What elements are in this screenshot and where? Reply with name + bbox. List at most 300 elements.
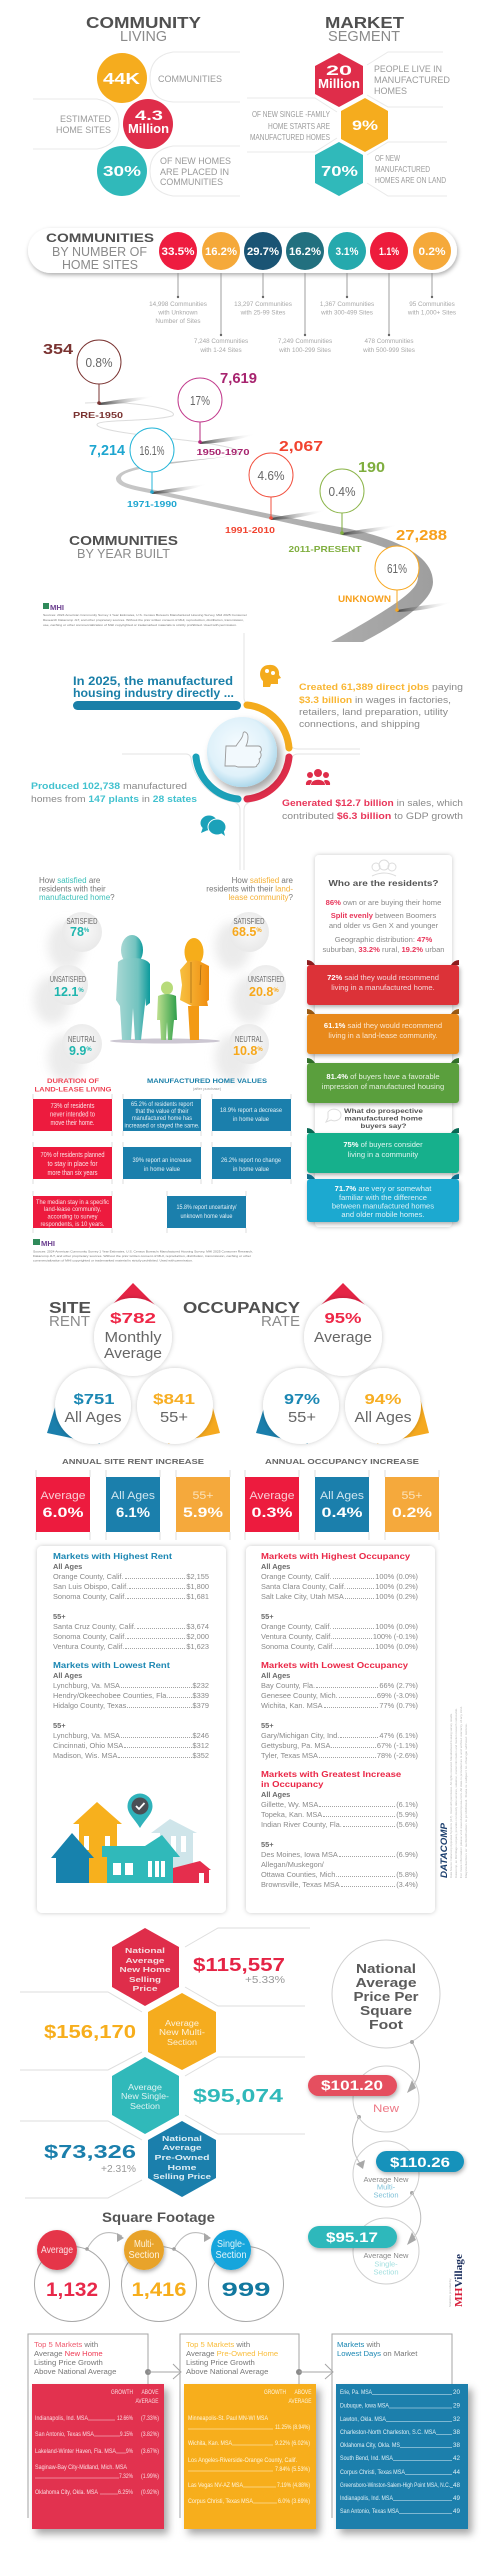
- card: no change: 26.2% report no change: [221, 1157, 281, 1164]
- stat: 30% placed in communities: COMMUNITIES: [160, 177, 223, 188]
- price: new $101.20: New: [373, 2103, 399, 2115]
- stat: satisfied 68.5%: 68.5: [232, 925, 256, 939]
- stat: all ages 0.4%: All Ages: [320, 1490, 365, 1502]
- marker: pre-1950: PRE-1950: [73, 410, 123, 420]
- heading: Listing Price Growth: [34, 2358, 103, 2367]
- list: markets with highest, lowest and greatest increase in occupancy: Indian River County, Fla.: [261, 1820, 342, 1829]
- card: median stay: according to survey: [48, 1214, 98, 1220]
- site count labels: 7,248 Communities: [194, 338, 248, 345]
- list: markets with highest, lowest and greatest increase in occupancy: All Ages: [261, 1562, 290, 1571]
- data table: 6.0% (3.69%): [278, 2498, 310, 2505]
- stat: 55+ 0.2%: 55+: [402, 1490, 422, 1502]
- stat: 55+ 5.9%: 5.9%: [183, 1504, 224, 1520]
- list: markets with highest and lowest rent: Madison, Wis. MSA: [53, 1751, 117, 1760]
- card: stay in place: to stay in place for: [48, 1161, 98, 1168]
- percent circles: 0.2%: [418, 246, 446, 258]
- hexagon: new single-section: Average: [128, 2083, 162, 2092]
- card: increased or stayed: increased or stayed the same.: [124, 1122, 200, 1130]
- banner: 72% recommend: [307, 960, 459, 1005]
- vertical credit: MHVillage: [448, 2253, 465, 2307]
- list: markets with highest and lowest rent: $1,623: [186, 1642, 209, 1651]
- marker: pre-1950: 354: [43, 341, 74, 358]
- percent circles: 3.1%: [336, 246, 359, 258]
- list: markets with highest and lowest rent: Hidalgo County, Texas: [53, 1701, 126, 1710]
- price: new $101.20: $101.20: [321, 2078, 383, 2093]
- banner: 81.4% favorable: impression of manufactured housing: [322, 1082, 444, 1091]
- hexagon: new home selling price: New Home: [120, 1965, 170, 1974]
- stat: average 6.0%: [36, 1477, 90, 1532]
- value: $115,557: $115,557: [193, 1955, 285, 1975]
- price: multi-section $110.26: Section: [373, 2190, 399, 2200]
- marker: 1971-1990: 16.1%: [140, 443, 165, 458]
- data table: 49: [453, 2495, 460, 2502]
- list: markets with highest, lowest and greatest increase in occupancy: 47% (6.1%): [379, 1731, 418, 1740]
- data table: (0.92%): [141, 2489, 159, 2496]
- banner: 81.4% favorable: [307, 1058, 459, 1103]
- price: single-section $95.17: $95.17: [326, 2230, 378, 2245]
- panel: duration of land-lease living: [33, 1078, 112, 1228]
- hexagon: pre-owned selling price: [148, 2121, 216, 2197]
- stat: 55+ 5.9%: [176, 1477, 230, 1532]
- heading: occupancy rate: [183, 1300, 301, 1330]
- heading: by number of home sites: BY NUMBER OF: [52, 244, 147, 259]
- stat: 44K communities: COMMUNITIES: [158, 74, 222, 85]
- stat: unsatisfied 20.8%: %: [273, 988, 279, 994]
- percent circles: 1.1%: [379, 246, 399, 258]
- price: multi-section $110.26: $110.26: [390, 2155, 451, 2170]
- list: markets with highest and lowest rent: Ventura County, Calif.: [53, 1642, 124, 1651]
- stat: average 0.3%: Average: [250, 1490, 294, 1502]
- stat: single-section 999: Section: [216, 2249, 247, 2261]
- stat: average 6.0%: Average: [40, 1490, 86, 1502]
- icon: chat bubbles: [200, 816, 226, 836]
- list: markets with highest, lowest and greatest increase in occupancy: Sonoma County, Calif.: [261, 1642, 334, 1651]
- percent circles: 29.7%: [247, 246, 279, 258]
- card: decrease: [212, 1099, 291, 1131]
- heading: market segment: MARKET: [325, 15, 405, 32]
- stat: unsatisfied 12.1%: 12.1: [54, 985, 78, 999]
- callout: $841 55+: [137, 1368, 220, 1444]
- list: markets with highest, lowest and greatest increase in occupancy: 66% (2.7%): [379, 1681, 418, 1690]
- card: median stay: The median stay in a specific: [36, 1199, 110, 1206]
- heading: market segment: [325, 15, 405, 45]
- stat: 4.3 million home sites: HOME SITES: [56, 125, 111, 136]
- site count labels: with 100-299 Sites: [278, 347, 331, 354]
- resident facts: [322, 898, 445, 954]
- man: [116, 935, 150, 1040]
- heading: Above National Average: [186, 2367, 268, 2376]
- source note with MHI logo: [43, 603, 247, 627]
- vertical credit: Datacomp: Reproduction or redistribution is prohibited. Data is subject to change without notice.: [464, 1723, 468, 1878]
- list: markets with highest, lowest and greatest increase in occupancy: 100% (0.0%): [375, 1622, 418, 1631]
- source note with MHI logo: Sources: 2024 American Community Survey 1 Year Estimates, U.S. Census Bureau's Manufactured Housing Survey, MHI 2025 Consumer: [43, 613, 247, 617]
- teal house: [102, 1835, 180, 1883]
- data table: Oklahoma City, Okla. MSA: [35, 2489, 98, 2496]
- data table: Indianapolis, Ind. MSA: [35, 2415, 88, 2422]
- stat: neutral 9.9%: NEUTRAL: [68, 1034, 96, 1044]
- marker: 2011-present: [288, 459, 398, 554]
- stat: single-section 999: Single-: [217, 2238, 245, 2250]
- hexagon: pre-owned selling price: Selling Price: [153, 2172, 211, 2181]
- circle: title: National: [356, 1961, 416, 1976]
- data table: AVERAGE: [136, 2398, 159, 2405]
- stat: 4.3 million home sites: ESTIMATED: [60, 114, 111, 125]
- card: decrease: 18.9% report a decrease: [220, 1107, 282, 1114]
- centre ball with thumbs up icon: [207, 717, 277, 787]
- data table: San Antonio, Texas MSA: [340, 2508, 399, 2515]
- list: markets with highest and lowest rent: $2,155: [186, 1572, 209, 1581]
- marker: 1971-1990: [89, 428, 208, 509]
- stat: 30% placed in communities: ARE PLACED IN: [160, 167, 229, 178]
- stat: 9% of starts: OF NEW SINGLE -FAMILY: [252, 109, 330, 119]
- list: markets with highest, lowest and greatest increase in occupancy: Ventura County, Calif.: [261, 1632, 332, 1641]
- arrow: [145, 2364, 181, 2379]
- panel: national average price per square foot: [308, 1940, 464, 2284]
- source note 2 with MHI logo: commercialization of MHI copyrighted or trademarked material is strictly prohibited. Used with permission.: [33, 1258, 193, 1262]
- callout: $841 55+: $841: [153, 1392, 195, 1408]
- list: markets with highest and lowest rent: $312: [193, 1741, 209, 1750]
- arrows: [85, 2233, 211, 2251]
- heading: annual occupancy increase: ANNUAL OCCUPANCY INCREASE: [265, 1457, 419, 1466]
- data table: Los Angeles-Riverside-Orange County, Calif.: [188, 2457, 297, 2464]
- panel: who are the residents: [307, 855, 459, 1227]
- sub-heading: greatest increase: in Occupancy: [261, 1780, 323, 1789]
- ring arcs: [196, 705, 289, 799]
- stat: neutral 10.8%: NEUTRAL: [235, 1034, 263, 1044]
- hexagon: pre-owned selling price: Pre-Owned: [154, 2153, 210, 2162]
- resident facts: 86% own or are buying their home: [326, 898, 441, 907]
- stat: 4.3 million home sites: Million: [128, 122, 169, 136]
- list: markets with highest and lowest rent: Lynchburg, Va. MSA: [53, 1731, 120, 1740]
- stat: unsatisfied 20.8%: UNSATISFIED: [248, 974, 284, 984]
- source note with MHI logo: MHI: [50, 605, 64, 612]
- callout: $782 monthly average: $782: [110, 1310, 156, 1327]
- list: markets with highest, lowest and greatest increase in occupancy: Wichita, Kan. MSA: [261, 1701, 323, 1710]
- hexagon: pre-owned selling price: National: [162, 2134, 202, 2143]
- road: [85, 402, 433, 642]
- data table: 42: [453, 2455, 460, 2462]
- heading: Above National Average: [34, 2367, 116, 2376]
- site count labels: 13,297 Communities: [234, 301, 292, 308]
- data table: 11.25% (8.94%): [275, 2424, 310, 2431]
- hexagon: new home selling price: National: [125, 1946, 165, 1955]
- card: median stay: respondents, is 10 years.: [40, 1221, 105, 1228]
- data table: 38: [453, 2429, 460, 2436]
- card: never intended to move: [33, 1099, 112, 1131]
- list: markets with highest and lowest rent: [53, 1552, 209, 1760]
- resident facts: suburban, 33.2% rural, 19.2% urban: [322, 945, 445, 954]
- heading: communities by year built: BY YEAR BUILT: [77, 546, 170, 561]
- list: markets with highest, lowest and greatest increase in occupancy: Ottawa Counties, Mich.: [261, 1870, 337, 1879]
- callout: 97% 55+: [256, 1368, 339, 1444]
- list: markets with highest and lowest rent: All Ages: [53, 1562, 82, 1571]
- icon: faint people: [372, 860, 396, 876]
- card: decrease: in home value: [233, 1116, 269, 1123]
- question: land-lease: residents with their land-: [206, 884, 293, 894]
- site count labels: with 500-999 Sites: [362, 347, 415, 354]
- heading: Markets with: [337, 2340, 380, 2349]
- stat: neutral 9.9%: %: [86, 1047, 92, 1053]
- marker: unknown: 27,288: [396, 527, 447, 544]
- value: $115,557: +5.33%: [245, 1975, 285, 1986]
- percent circles: 16.2%: [205, 246, 237, 258]
- stat: all ages 6.1%: [106, 1477, 160, 1532]
- banner: 72% recommend: 72% said they would recommend: [327, 973, 439, 982]
- question: manufactured home: How satisfied are: [39, 876, 101, 885]
- callout: $841 55+: 55+: [160, 1409, 188, 1426]
- data table: Wichita, Kan. MSA: [188, 2440, 232, 2447]
- data table: 6.25%: [118, 2489, 133, 2496]
- card: uncertain: [167, 1196, 246, 1228]
- data table: Lawton, Okla. MSA: [340, 2416, 386, 2423]
- stat: 30% placed in communities: [97, 146, 231, 196]
- stat: 9% of starts: 9%: [352, 117, 379, 133]
- percent circles: [159, 232, 451, 270]
- card: increase: [123, 1147, 201, 1179]
- hexagon: new home selling price: Selling: [129, 1975, 161, 1984]
- list: markets with highest, lowest and greatest increase in occupancy: 100% (-0.1%): [373, 1632, 418, 1641]
- heading: site rent: RENT: [49, 1313, 90, 1330]
- stat: average 6.0%: 6.0%: [42, 1504, 84, 1520]
- card: stay in place: more than six years: [48, 1170, 98, 1177]
- data table: (7.33%): [141, 2415, 159, 2422]
- list: markets with highest and lowest rent: $232: [193, 1681, 209, 1690]
- text: jobs: Created 61,389 direct jobs paying: [299, 682, 463, 692]
- stat: satisfied 78%: SATISFIED: [66, 916, 98, 926]
- text: sales: [282, 798, 463, 821]
- heading: Average New Home: [34, 2349, 103, 2358]
- data table: Corpus Christi, Texas MSA: [188, 2498, 253, 2505]
- data table: (1.99%): [141, 2473, 159, 2480]
- card background: rent markets: [37, 1546, 226, 1913]
- marker: 1950-1970: 17%: [190, 393, 210, 408]
- marker: 1971-1990: 7,214: [89, 442, 126, 459]
- marker: 2011-present: 190: [358, 459, 385, 476]
- marker: unknown: 61%: [387, 561, 407, 576]
- circle: title: Foot: [369, 2017, 404, 2032]
- heading: occupancy rate: RATE: [261, 1313, 300, 1330]
- vertical credit: Datacomp: For more information please visit www.datacompusa.com. All data is provided as is and without warranty of any kind.: [459, 1706, 463, 1878]
- hexagon: new multi-section: New Multi-: [159, 2028, 205, 2037]
- card: increased or stayed: [123, 1099, 201, 1131]
- arrows between circles: [352, 2042, 421, 2241]
- card: increase: in home value: [144, 1166, 180, 1173]
- hexagon: new home selling price: Price: [132, 1984, 158, 1993]
- site count labels: 7,249 Communities: [278, 338, 332, 345]
- heading: in 2025: In 2025, the manufactured: [73, 676, 233, 688]
- data table: (3.67%): [141, 2448, 159, 2455]
- site count labels: with Unknown: [157, 310, 198, 316]
- list: markets with highest, lowest and greatest increase in occupancy: 100% (0.0%): [375, 1642, 418, 1651]
- list: markets with highest and lowest rent: Sonoma County, Calif.: [53, 1632, 126, 1641]
- banner: 61.1% recommend: 61.1% said they would recommend: [324, 1021, 442, 1030]
- text: sales: contributed $6.3 billion to GDP growth: [282, 811, 463, 821]
- value: $115,557: [193, 1955, 285, 1986]
- panel: top 5 markets new home growth: [28, 2334, 181, 2529]
- sub-heading: greatest increase: Markets with Greatest Increase: [261, 1770, 401, 1779]
- heading: Top 5 Markets with: [186, 2340, 250, 2349]
- icon: people: [306, 769, 330, 785]
- list: markets with highest, lowest and greatest increase in occupancy: (5.8%): [396, 1870, 418, 1879]
- callout: 94% all ages: 94%: [364, 1392, 402, 1408]
- source note 2 with MHI logo: Sources: 2024 American Community Survey 1 Year Estimates, U.S. Census Bureau's Manufactured Housing Survey, MHI 2025 Consumer Research,: [33, 1250, 253, 1254]
- question: land-lease: lease community?: [229, 893, 294, 902]
- marker: 2011-present: 0.4%: [328, 484, 356, 499]
- list: markets with highest and lowest rent: $2,000: [186, 1632, 209, 1641]
- sub-heading: prospective buyers: manufactured home: [344, 1116, 423, 1122]
- question: manufactured home: residents with their: [39, 884, 106, 894]
- card: never intended to move: never intended to: [50, 1112, 95, 1118]
- site count labels: with 1-24 Sites: [199, 347, 242, 354]
- price: single-section $95.17: Single-: [374, 2260, 398, 2268]
- text: production: [31, 781, 197, 804]
- list: markets with highest, lowest and greatest increase in occupancy: 55+: [261, 1840, 274, 1849]
- stat: satisfied 78%: 78: [70, 925, 84, 939]
- sub-heading: highest rent: Markets with Highest Rent: [53, 1552, 172, 1561]
- vertical credit: MHVillage: MHVillage: [454, 2253, 465, 2307]
- stat: neutral 9.9%: [48, 1024, 102, 1082]
- stat: unsatisfied 12.1%: UNSATISFIED: [50, 974, 86, 984]
- list: markets with highest and lowest rent: All Ages: [53, 1671, 82, 1680]
- list: markets with highest, lowest and greatest increase in occupancy: Tyler, Texas MSA: [261, 1751, 318, 1760]
- list: markets with highest and lowest rent: $3,674: [186, 1622, 209, 1631]
- data table: Lakeland-Winter Haven, Fla. MSA: [35, 2448, 116, 2455]
- site count labels: with 1,000+ Sites: [407, 310, 456, 316]
- heading: site rent: SITE: [49, 1300, 91, 1317]
- heading: square footage: Square Footage: [102, 2210, 216, 2225]
- list: markets with highest, lowest and greatest increase in occupancy: [261, 1552, 418, 1889]
- percent circles: 16.2%: [289, 246, 321, 258]
- stat: multi-section 1,416: [122, 2230, 196, 2322]
- card: increase: 39% report an increase: [132, 1157, 192, 1164]
- data table: 48: [453, 2482, 460, 2489]
- source note with MHI logo: use, caching or other commercialization of MHI copyrighted or trademarked materials is strictly prohibited. Used with permission.: [43, 623, 237, 627]
- heading: annual site rent increase: ANNUAL SITE RENT INCREASE: [62, 1457, 204, 1466]
- list: markets with highest and lowest rent: San Luis Obispo, Calif.: [53, 1582, 128, 1591]
- list: markets with highest, lowest and greatest increase in occupancy: (5.6%): [396, 1820, 418, 1829]
- sub-heading: prospective buyers: What do prospective: [344, 1108, 424, 1115]
- child: [157, 982, 177, 1040]
- hexagon: new single-section: [112, 2057, 179, 2134]
- stat: multi-section 1,416: Multi-: [134, 2238, 154, 2250]
- panel: manufactured home values: MANUFACTURED HOME VALUES: [147, 1078, 268, 1085]
- list: markets with highest, lowest and greatest increase in occupancy: (6.1%): [396, 1800, 418, 1809]
- stat: 70% on land: HOMES ARE ON LAND: [375, 175, 446, 185]
- panel: community stats: [33, 52, 240, 196]
- stat: 4.3 million home sites: [56, 99, 173, 149]
- data table: GROWTH: [264, 2389, 286, 2396]
- value: $73,326: [44, 2142, 136, 2175]
- data table: Indianapolis, Ind. MSA: [340, 2495, 393, 2502]
- list: markets with highest and lowest rent: $352: [193, 1751, 209, 1760]
- hexagon: pre-owned selling price: Average: [162, 2143, 202, 2152]
- price: single-section $95.17: Average New: [364, 2251, 409, 2260]
- list: markets with highest, lowest and greatest increase in occupancy: Genesee County, Mich.: [261, 1691, 338, 1700]
- data table: Saginaw-Bay City-Midland, Mich. MSA: [35, 2464, 127, 2471]
- stat: 4.3 million home sites: 4.3: [135, 108, 164, 123]
- stat: 55+ 0.2%: 0.2%: [392, 1504, 433, 1520]
- data table: 9.22% (6.02%): [275, 2440, 310, 2447]
- heading: occupancy rate: OCCUPANCY: [183, 1300, 301, 1317]
- stat: 70% on land: OF NEW: [375, 153, 400, 163]
- panel: markets with lowest days on market: [332, 2334, 468, 2529]
- banner: 61.1% recommend: living in a land-lease community.: [328, 1031, 438, 1040]
- data table: South Bend, Ind. MSA: [340, 2455, 393, 2462]
- callout: 97% 55+: 55+: [288, 1409, 316, 1426]
- list: markets with highest, lowest and greatest increase in occupancy: Des Moines, Iowa MSA: [261, 1850, 338, 1859]
- marker: pre-1950: [43, 340, 155, 420]
- data table: 29: [453, 2402, 460, 2410]
- callout: 97% 55+: 97%: [284, 1392, 320, 1408]
- data table: Oklahoma City, Okla. MS: [340, 2442, 400, 2449]
- source note with MHI logo: Research Datacomp JLT, and other proprietary sources. Without the prior written consent of MHI, reproduction, distribution, transmission,: [43, 618, 244, 622]
- card: median stay: [33, 1196, 112, 1228]
- data table: 32: [453, 2416, 460, 2423]
- card background: occupancy markets: [246, 1546, 435, 1913]
- callout: 95% average: Average: [314, 1329, 372, 1346]
- data table: ABOVE: [294, 2389, 312, 2396]
- panel: top 5 markets pre-owned growth: [180, 2334, 333, 2529]
- text: jobs: connections, and shipping: [299, 719, 420, 729]
- red house: [173, 1861, 211, 1883]
- data table: 9.15%: [120, 2431, 133, 2438]
- data table: 9%: [126, 2448, 133, 2455]
- list: markets with highest, lowest and greatest increase in occupancy: Gary/Michigan City, Ind.: [261, 1731, 339, 1740]
- list: markets with highest, lowest and greatest increase in occupancy: 55+: [261, 1721, 274, 1730]
- data table: Corpus Christi, Texas MSA: [340, 2469, 405, 2476]
- stat: 20 million people: 20: [326, 62, 352, 78]
- callout: $782 monthly average: [94, 1283, 172, 1376]
- stat: satisfied 68.5%: SATISFIED: [234, 916, 264, 926]
- illustration: houses with location pin: [51, 1794, 211, 1883]
- sub-heading: lowest occupancy: Markets with Lowest Occupancy: [261, 1661, 408, 1670]
- stat: neutral 9.9%: 9.9: [69, 1044, 86, 1058]
- stat: all ages 0.4%: [315, 1477, 369, 1532]
- heading: community living: [86, 15, 202, 45]
- data table: Greensboro-Winston-Salem-High Point MSA, N.C.: [340, 2482, 450, 2489]
- callout: 95% average: [304, 1283, 382, 1376]
- list: markets with highest and lowest rent: Lynchburg, Va. MSA: [53, 1681, 120, 1690]
- text: production: homes from 147 plants in 28 states: [31, 794, 197, 804]
- stat: all ages 6.1%: 6.1%: [116, 1504, 151, 1520]
- stat: unsatisfied 12.1%: [34, 965, 88, 1024]
- marker: 1950-1970: 1950-1970: [196, 447, 250, 457]
- list: markets with highest, lowest and greatest increase in occupancy: 69% (-3.0%): [377, 1691, 418, 1700]
- sub-heading: greatest increase: [261, 1770, 401, 1789]
- list: markets with highest and lowest rent: $379: [193, 1701, 209, 1710]
- marker: unknown: [338, 527, 453, 612]
- heading: by number of home sites: COMMUNITIES: [46, 231, 154, 245]
- stat: 30% placed in communities: OF NEW HOMES: [160, 156, 231, 167]
- data table: Erie, Pa. MSA: [340, 2389, 372, 2396]
- callout: $751 all ages: $751: [74, 1392, 114, 1408]
- percent circles: 33.5%: [162, 246, 195, 258]
- banner: 72% recommend: living in a manufactured home.: [331, 983, 435, 992]
- card: no change: [212, 1147, 291, 1179]
- hexagon: pre-owned selling price: Home: [168, 2163, 196, 2172]
- price: multi-section $110.26: [353, 2141, 464, 2207]
- heading: communities by year built: COMMUNITIES: [69, 534, 178, 548]
- heading: Listing Price Growth: [186, 2358, 255, 2367]
- vertical credit: Datacomp: [439, 1706, 468, 1878]
- location pin: [128, 1794, 152, 1828]
- heading: by number of home sites: HOME SITES: [62, 257, 138, 272]
- source note 2 with MHI logo: MHI: [41, 1241, 55, 1248]
- list: markets with highest and lowest rent: 55+: [53, 1721, 66, 1730]
- marker: 1950-1970: [178, 370, 257, 457]
- heading: community living: COMMUNITY: [86, 15, 202, 32]
- price: single-section $95.17: Section: [373, 2268, 399, 2276]
